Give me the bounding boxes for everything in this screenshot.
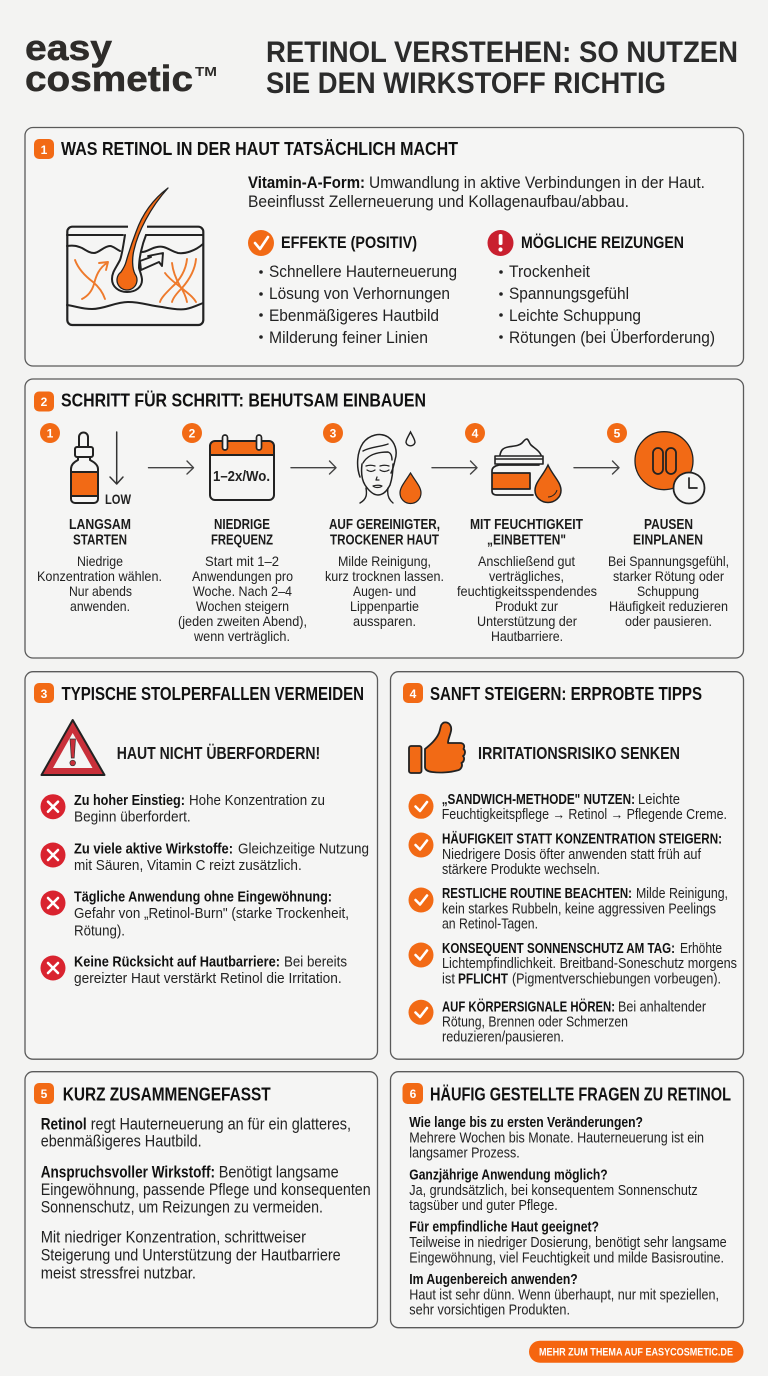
step 2 <box>178 423 307 644</box>
subheading: IRRITATIONSRISIKO SENKEN <box>478 743 680 763</box>
badge 4 <box>403 683 423 703</box>
subheading: Effekte: EFFEKTE (POSITIV) <box>281 233 417 252</box>
intro text: Beeinflusst Zellerneuerung und Kollagenaufbau/abbau. <box>248 192 629 211</box>
pitfall list: Zu hoher Einstieg: <box>74 792 185 809</box>
arrow <box>291 461 336 474</box>
step text: feuchtigkeitsspendendes <box>457 583 597 599</box>
step title: FREQUENZ <box>211 532 273 548</box>
faq items: Für empfindliche Haut geeignet? <box>409 1220 599 1236</box>
badge 4: 4 <box>410 687 417 701</box>
icon: calendar: 1–2x/Wo. <box>213 468 270 485</box>
icons: orange check markers <box>408 794 434 1025</box>
step text: kurz trocknen lassen. <box>325 568 444 584</box>
step text: Schuppung <box>637 583 699 599</box>
summary text: Retinol <box>41 1114 87 1133</box>
tips list <box>442 792 737 1046</box>
step title: MIT FEUCHTIGKEIT <box>470 517 583 533</box>
tips list: Leichte <box>638 792 680 808</box>
pitfall list: Tägliche Anwendung ohne Eingewöhnung: <box>74 889 332 906</box>
step text: Produkt zur <box>495 598 558 614</box>
summary text: ebenmäßigeres Hautbild. <box>41 1132 202 1151</box>
step text: Augen- und <box>353 583 416 599</box>
summary text: Sonnenschutz, um Reizungen zu vermeiden. <box>41 1198 323 1217</box>
arrow <box>574 461 619 474</box>
step text: Hautbarriere. <box>491 628 563 644</box>
step 4 <box>457 423 597 644</box>
list: Reizungen: Trockenheit <box>509 262 590 281</box>
icon: check <box>248 230 274 256</box>
icons: red cross markers <box>40 794 66 980</box>
list: Reizungen <box>499 262 715 347</box>
pitfall list: Gefahr von „Retinol-Burn" (starke Trockenheit, <box>74 905 349 922</box>
icon: thumbs up <box>409 722 465 773</box>
list: Reizungen: Spannungsgefühl <box>509 284 629 303</box>
tips list: Milde Reinigung, <box>636 886 728 902</box>
step title: NIEDRIGE <box>214 517 270 533</box>
summary text: Mit niedriger Konzentration, schrittweiser <box>41 1228 306 1247</box>
call to action button <box>529 1341 744 1363</box>
logo: easy cosmetic: TM <box>195 64 217 79</box>
step text: Milde Reinigung, <box>338 553 431 569</box>
pitfall list <box>74 792 369 987</box>
panel: Kurz zusammengefasst <box>25 1072 378 1328</box>
faq items: sehr vorsichtigen Produkten. <box>409 1302 570 1318</box>
pitfall list: Gleichzeitige Nutzung <box>238 840 369 857</box>
step text: Bei Spannungsgefühl, <box>608 553 729 569</box>
step text: Konzentration wählen. <box>37 568 162 584</box>
panel: FAQ <box>390 1072 744 1328</box>
list: Effekte <box>259 262 457 347</box>
step text: Anwendungen pro <box>192 568 293 584</box>
icon: calendar <box>210 435 274 500</box>
panel: was Retinol macht <box>25 128 744 366</box>
title: SIE DEN WIRKSTOFF RICHTIG <box>266 67 666 100</box>
tips list: an Retinol-Tagen. <box>442 917 538 933</box>
badge 6 <box>402 1083 423 1104</box>
step text: Start mit 1–2 <box>205 553 279 569</box>
tips list: Bei anhaltender <box>618 1000 706 1016</box>
step text <box>608 553 729 629</box>
step 5 <box>607 423 729 629</box>
badge 1 <box>34 139 54 159</box>
heading 2: SCHRITT FÜR SCHRITT: BEHUTSAM EINBAUEN <box>61 390 426 411</box>
tips list: kein starkes Rubbeln, keine aggressiven Peelings <box>442 902 716 918</box>
pitfall list: mit Säuren, Vitamin C reizt zusätzlich. <box>74 857 302 874</box>
step text: starker Rötung oder <box>613 568 724 584</box>
list: Effekte: Lösung von Verhornungen <box>269 284 450 303</box>
arrow <box>432 461 477 474</box>
heading 4: SANFT STEIGERN: ERPROBTE TIPPS <box>430 683 702 704</box>
step title <box>470 517 583 548</box>
icon: low arrow: LOW <box>105 491 132 507</box>
badge 2: 2 <box>41 395 48 409</box>
icon: warning triangle <box>42 720 104 775</box>
summary text: Benötigt langsame <box>219 1162 339 1181</box>
tips list: (Pigmentverschiebungen vorbeugen). <box>512 972 721 988</box>
pitfall list: gereizter Haut verstärkt Retinol die Irritation. <box>74 970 342 987</box>
step text: Anschließend gut <box>478 553 575 569</box>
badge 5 <box>34 1083 54 1104</box>
badge 3: 3 <box>41 687 48 701</box>
faq items: tagsüber und guter Pflege. <box>409 1198 558 1214</box>
faq items: Ja, grundsätzlich, bei konsequentem Sonnenschutz <box>409 1183 698 1199</box>
intro text: Vitamin-A-Form: <box>248 173 365 192</box>
intro text: Umwandlung in aktive Verbindungen in der Haut. <box>369 173 705 192</box>
step text: aussparen. <box>353 613 416 629</box>
step title <box>633 517 703 548</box>
step title <box>69 517 131 548</box>
step title: TROCKENER HAUT <box>330 532 439 548</box>
tips list: ist <box>442 972 455 988</box>
step text: anwenden. <box>70 598 130 614</box>
icon: dropper bottle <box>71 432 98 503</box>
badge 5: 5 <box>41 1087 48 1101</box>
step text: Nur abends <box>69 583 132 599</box>
step title: PAUSEN <box>644 517 693 533</box>
summary text: Steigerung und Unterstützung der Hautbarriere <box>41 1245 341 1264</box>
icon: pause and clock <box>635 432 704 504</box>
step 1: 1 <box>47 426 54 440</box>
summary text: meist stressfrei nutzbar. <box>41 1263 196 1282</box>
faq items: Im Augenbereich anwenden? <box>409 1272 578 1288</box>
faq items: Eingewöhnung, viel Feuchtigkeit und milde Basisroutine. <box>409 1250 724 1266</box>
tips list: Niedrigere Dosis öfter anwenden statt früh auf <box>442 847 702 863</box>
list: Reizungen: Rötungen (bei Überforderung) <box>509 328 715 347</box>
panel: Sanft steigern <box>390 672 744 1059</box>
logo: easy cosmetic: easy <box>25 27 112 68</box>
tips list: „SANDWICH-METHODE" NUTZEN: <box>442 792 635 808</box>
icon: alert <box>488 230 514 256</box>
step text: wenn verträglich. <box>193 628 290 644</box>
tips list: Feuchtigkeitspflege → Retinol → Pflegende Creme. <box>442 807 727 823</box>
step 5: 5 <box>614 426 621 440</box>
step text <box>178 553 307 644</box>
step title: „EINBETTEN" <box>487 532 566 548</box>
list: Effekte: Schnellere Hauterneuerung <box>269 262 457 281</box>
step text <box>37 553 162 614</box>
arrow <box>148 461 194 474</box>
badge 6: 6 <box>410 1087 417 1101</box>
step title: EINPLANEN <box>633 532 703 548</box>
step 2: 2 <box>189 426 196 440</box>
summary text: regt Hauterneuerung an für ein glatteres, <box>91 1114 351 1133</box>
summary text <box>41 1114 371 1282</box>
icon: low arrow <box>105 432 132 507</box>
step text: Häufigkeit reduzieren <box>609 598 728 614</box>
step 4: 4 <box>472 426 479 440</box>
tips list: KONSEQUENT SONNENSCHUTZ AM TAG: <box>442 941 675 957</box>
step text <box>457 553 597 644</box>
badge 2 <box>34 392 54 412</box>
step 1 <box>37 423 162 614</box>
step text: oder pausieren. <box>625 613 712 629</box>
panel: Schritt für Schritt <box>25 379 744 658</box>
heading 3: TYPISCHE STOLPERFALLEN VERMEIDEN <box>62 683 364 704</box>
subheading: Reizungen: MÖGLICHE REIZUNGEN <box>521 233 684 252</box>
step text <box>325 553 444 629</box>
list: Reizungen: Leichte Schuppung <box>509 306 641 325</box>
summary text: Eingewöhnung, passende Pflege und konsequenten <box>41 1180 371 1199</box>
logo: easy cosmetic <box>25 27 217 99</box>
step text: Woche. Nach 2–4 <box>193 583 292 599</box>
tips list: AUF KÖRPERSIGNALE HÖREN: <box>442 999 615 1016</box>
list: Effekte: Milderung feiner Linien <box>269 328 428 347</box>
tips list: RESTLICHE ROUTINE BEACHTEN: <box>442 886 632 902</box>
tips list: Erhöhte <box>680 941 722 957</box>
pitfall list: Keine Rücksicht auf Hautbarriere: <box>74 954 280 971</box>
step title <box>329 517 440 548</box>
tips list: stärkere Produkte wechseln. <box>442 862 600 878</box>
title <box>266 36 738 100</box>
tips list: reduzieren/pausieren. <box>442 1030 564 1046</box>
step text: Unterstützung der <box>477 613 577 629</box>
icon: face with towel and drops <box>358 432 421 504</box>
step text: verträgliches, <box>489 568 564 584</box>
icon: skin cross-section with hair follicle <box>67 188 203 325</box>
pitfall list: Beginn überfordert. <box>74 809 191 826</box>
list: Effekte: Ebenmäßigeres Hautbild <box>269 306 439 325</box>
tips list: Rötung, Brennen oder Schmerzen <box>442 1015 628 1031</box>
step text: Niedrige <box>77 553 123 569</box>
call to action button: MEHR ZUM THEMA AUF EASYCOSMETIC.DE <box>539 1347 733 1359</box>
step title <box>211 517 273 548</box>
summary text: Anspruchsvoller Wirkstoff: <box>41 1162 215 1181</box>
intro text <box>248 173 705 211</box>
badge 1: 1 <box>41 143 48 157</box>
pitfall list: Bei bereits <box>284 954 347 971</box>
title: RETINOL VERSTEHEN: SO NUTZEN <box>266 36 738 69</box>
faq items: Haut ist sehr dünn. Wenn überhaupt, nur mit speziellen, <box>409 1287 719 1303</box>
tips list: PFLICHT <box>458 972 508 988</box>
pitfall list: Rötung). <box>74 923 125 940</box>
subheading: HAUT NICHT ÜBERFORDERN! <box>117 743 320 763</box>
faq items: Ganzjährige Anwendung möglich? <box>409 1167 608 1183</box>
step text: Wochen steigern <box>196 598 289 614</box>
faq items: Wie lange bis zu ersten Veränderungen? <box>409 1115 643 1131</box>
faq items <box>409 1115 727 1318</box>
faq items: Teilweise in niedriger Dosierung, benötigt sehr langsame <box>409 1235 727 1251</box>
step text: (jeden zweiten Abend), <box>178 613 307 629</box>
step title: AUF GEREINIGTER, <box>329 517 440 533</box>
heading 1: WAS RETINOL IN DER HAUT TATSÄCHLICH MACHT <box>61 138 459 159</box>
pitfall list: Zu viele aktive Wirkstoffe: <box>74 840 233 857</box>
step text: Lippenpartie <box>350 598 419 614</box>
faq items: Mehrere Wochen bis Monate. Hauterneuerung ist ein <box>409 1130 704 1146</box>
heading 5: KURZ ZUSAMMENGEFASST <box>63 1084 271 1105</box>
badge 3 <box>34 683 54 703</box>
panel: Stolperfallen <box>25 672 378 1059</box>
icon: cream jar and drop <box>492 439 561 502</box>
pitfall list: Hohe Konzentration zu <box>189 792 325 809</box>
logo: easy cosmetic: cosmetic <box>25 58 193 99</box>
step title: STARTEN <box>73 532 127 548</box>
step 3 <box>323 423 444 629</box>
faq items: langsamer Prozess. <box>409 1146 520 1162</box>
step 3: 3 <box>330 426 337 440</box>
step title: LANGSAM <box>69 517 131 533</box>
